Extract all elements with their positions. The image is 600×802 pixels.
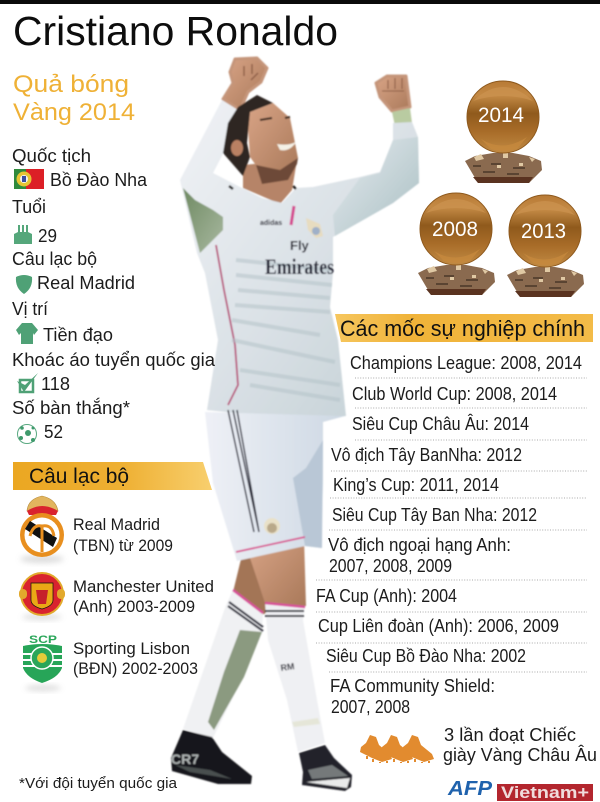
trophy: Ballon d'Or 2014: 2014 [478,104,524,127]
icon: shield [16,275,32,294]
neck [243,160,297,204]
profile facts [12,145,216,444]
top black bar [0,0,600,4]
goals [12,397,130,444]
club [12,248,135,294]
club: Real Madrid [20,496,173,563]
shirt logos: adidas [260,220,282,227]
club: Sporting Lisbon [23,634,198,691]
right fist and wrist [376,76,412,126]
trophy: Ballon d'Or 2014 [465,81,542,183]
icon: Sporting crest: SCP [29,634,57,646]
trophy: Ballon d'Or 2013 [507,195,584,297]
panel: career milestones list: 2007, 2008, 2009 [329,556,452,576]
club: Real Madrid [37,272,135,293]
club: Manchester United [19,573,214,620]
left forearm and fist [223,58,267,110]
age [12,196,57,246]
position: Tiền đạo [43,324,113,345]
goals: Số bàn thắng* [12,397,130,418]
national caps [12,349,216,394]
club: Manchester United: Manchester United [73,578,214,596]
panel: career milestones list: Vô địch ngoại hạng Anh: [328,535,511,555]
panel: career milestones list: Cup Liên đoàn (Anh): 2006, 2009 [318,616,559,636]
trophy: Ballon d'Or 2008 [418,193,495,295]
panel: clubs list [19,496,214,691]
right sock [265,603,325,752]
trophy: Ballon d'Or 2008: 2008 [432,218,478,241]
panel: career milestones list: FA Community Shield: [330,676,495,696]
left sock [183,590,263,738]
panel heading: career milestones: Các mốc sự nghiệp chính [340,316,585,341]
footnote: *Với đội tuyển quốc gia [19,775,178,792]
shirt logos [260,218,334,279]
club: Câu lạc bộ [12,248,97,269]
panel: career milestones list: 2007, 2008 [331,697,410,717]
icon: Manchester United crest [19,573,65,620]
subtitle: Golden Ball 2014: Quả bóng [13,71,129,98]
icon: Real Madrid crest [20,496,64,563]
shirt logos: Emirates [265,254,334,279]
age: 29 [38,225,57,246]
panel: career milestones list: Siêu Cup Bồ Đào Nha: 2002 [326,646,526,666]
goals: 52 [44,421,63,442]
icon: birthday cake [14,225,32,244]
panel: career milestones list: King’s Cup: 2011, 2014 [333,475,499,495]
national caps: 118 [41,373,70,394]
panel heading: clubs [13,462,212,490]
panel: career milestones list: Siêu Cup Tây Ban Nha: 2012 [332,505,537,525]
shorts [205,410,345,561]
left boot: CR7 [171,751,199,767]
icon: check mark [17,373,38,392]
subtitle: Golden Ball 2014: Vàng 2014 [13,99,135,126]
panel heading: clubs: Câu lạc bộ [29,465,129,488]
club: Sporting Lisbon: (BĐN) 2002-2003 [73,660,198,678]
callout: European Golden Shoe: 3 lần đoạt Chiếc [444,725,576,745]
icon: Sporting crest [23,634,62,691]
logo: AFP: AFP [447,778,493,800]
panel: career milestones list: Vô địch Tây BanNha: 2012 [331,445,522,465]
subtitle: Golden Ball 2014 [13,71,135,126]
icon: three golden boots [360,735,434,763]
icon: jersey [16,323,38,344]
position: Vị trí [12,298,49,319]
panel: career milestones list: FA Cup (Anh): 2004 [316,586,457,606]
left boot [171,730,252,784]
club: Sporting Lisbon: Sporting Lisbon [73,640,190,658]
trophy: Ballon d'Or 2013: 2013 [521,220,566,243]
head [223,95,298,184]
nationality: Quốc tịch [12,145,91,166]
back leg skin [233,555,268,615]
club: Real Madrid: (TBN) từ 2009 [73,537,173,555]
panel: career milestones list: Siêu Cup Châu Âu: 2014 [352,414,529,434]
icon: football [18,424,36,444]
nationality: Bồ Đào Nha [50,169,148,190]
club: Manchester United: (Anh) 2003-2009 [73,598,195,616]
callout: European Golden Shoe: giày Vàng Châu Âu [443,745,597,765]
panel: career milestones list: Champions League: 2008, 2014 [350,353,582,373]
panel: career milestones list [316,353,587,717]
callout: European Golden Shoe [443,725,597,765]
shirt with sleeves [180,100,419,418]
position [12,298,113,345]
icon: Portugal flag [14,169,44,189]
front thigh skin [248,538,306,606]
title: Cristiano Ronaldo [13,8,338,54]
shirt logos: Fly [290,238,310,253]
right sock: RM [280,661,295,673]
national caps: Khoác áo tuyển quốc gia [12,349,216,370]
club: Real Madrid: Real Madrid [73,516,160,534]
panel: career milestones list: Club World Cup: 2008, 2014 [352,384,557,404]
nationality [12,145,148,190]
logo: Vietnam+: Vietnam+ [501,783,589,802]
right boot [299,745,352,791]
player photo: Cristiano Ronaldo celebrating [171,58,419,791]
age: Tuổi [12,196,46,217]
